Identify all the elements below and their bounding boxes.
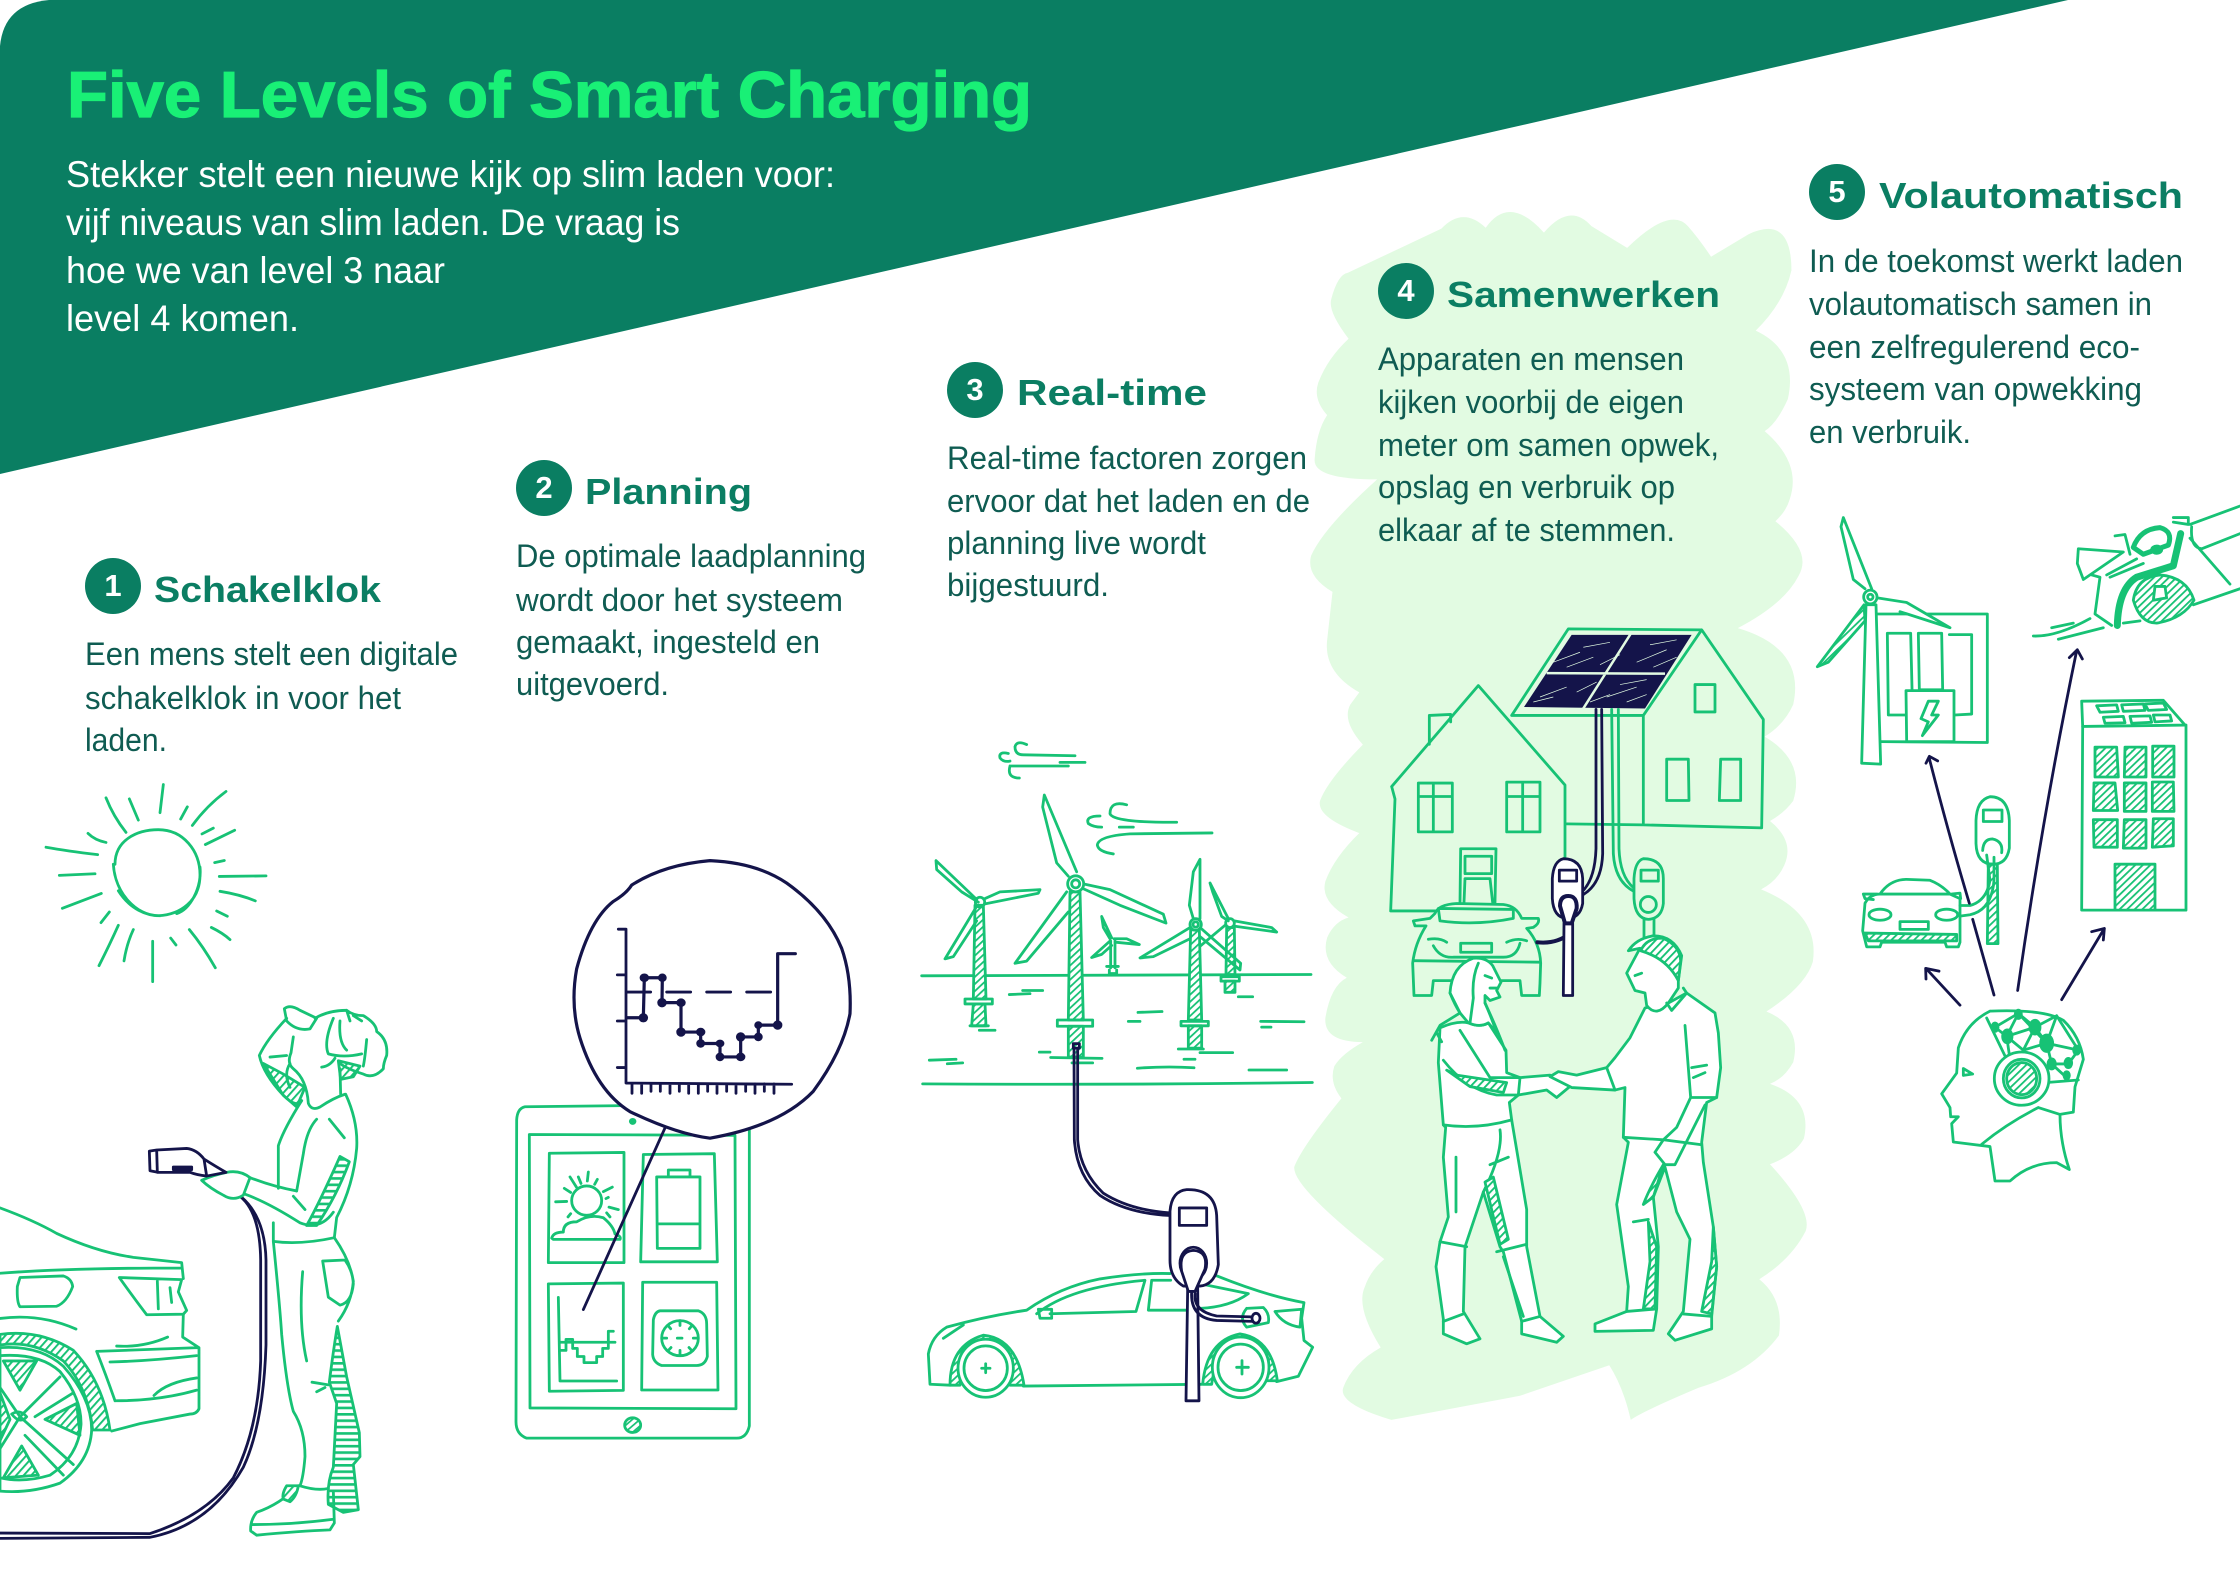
arrows — [1926, 650, 2104, 1005]
step 2 text: gemaakt, ingesteld en — [516, 624, 820, 660]
pointer line — [583, 1128, 665, 1310]
green charger — [1634, 859, 1663, 938]
step 2 text — [515, 538, 866, 702]
woman — [202, 1007, 387, 1535]
solar panels — [1524, 634, 1692, 709]
step 2 heading — [516, 460, 752, 516]
tablet — [516, 1104, 749, 1438]
charging cable — [0, 1196, 266, 1538]
step 3 text: bijgestuurd. — [947, 567, 1109, 603]
wind turbine and factory — [1817, 518, 1987, 764]
step 4 text: kijken voorbij de eigen — [1378, 384, 1684, 420]
header banner — [0, 0, 2068, 474]
intro text: Stekker stelt een nieuwe kijk op slim laden voor: — [66, 154, 835, 195]
step 4 heading — [1378, 263, 1720, 319]
step 1 heading — [85, 558, 382, 614]
car rear — [0, 1208, 199, 1492]
parked car — [1413, 903, 1541, 996]
step 4 text: opslag en verbruik op — [1378, 469, 1675, 505]
step 1 heading: 1 — [104, 568, 122, 603]
step 1 heading: Schakelklok — [154, 569, 382, 610]
icon: sun — [46, 785, 266, 982]
step 4 heading: Samenwerken — [1447, 274, 1720, 315]
step 5 text — [1809, 243, 2183, 450]
step 3 text: planning live wordt — [947, 525, 1206, 561]
step 1 text — [85, 636, 458, 758]
step 5 text: een zelfregulerend eco- — [1809, 329, 2140, 365]
illustration: level 3 wind park, charger and car — [922, 743, 1313, 1401]
step 1 text: Een mens stelt een digitale — [85, 636, 458, 672]
intro text — [66, 154, 835, 339]
woman shaking hands — [1432, 958, 1572, 1344]
step 5 heading — [1809, 164, 2183, 220]
car — [928, 1273, 1313, 1398]
step 2 heading: 2 — [535, 470, 553, 505]
AI head with neural network — [1942, 1010, 2083, 1181]
step 4 text: elkaar af te stemmen. — [1378, 512, 1675, 548]
step 2 text: wordt door het systeem — [515, 582, 843, 618]
intro text: level 4 komen. — [66, 298, 299, 339]
man shaking hands — [1550, 936, 1721, 1340]
step 3 heading: Real-time — [1017, 372, 1207, 413]
back house — [1512, 629, 1763, 828]
building — [2082, 700, 2186, 910]
title: Five Levels of Smart Charging — [67, 58, 1032, 131]
charger and car — [1863, 797, 2009, 947]
step 4 text: Apparaten en mensen — [1378, 341, 1684, 377]
step 5 text: In de toekomst werkt laden — [1809, 243, 2183, 279]
wind and sea — [922, 743, 1312, 1084]
charger with cable from turbine — [1073, 1044, 1260, 1401]
magnifier with price chart — [574, 861, 850, 1138]
illustration: level 5 AI brain controlling grid — [1817, 506, 2240, 1181]
step 3 text: Real-time factoren zorgen — [947, 440, 1307, 476]
step 2 text: uitgevoerd. — [516, 666, 669, 702]
front house — [1391, 686, 1565, 911]
step 1 text: laden. — [85, 722, 167, 758]
step 5 text: volautomatisch samen in — [1809, 286, 2152, 322]
wind turbines — [936, 795, 1277, 1057]
navy charger — [1537, 859, 1583, 996]
step 5 text: systeem van opwekking — [1809, 371, 2142, 407]
illustration: level 2 tablet with chart magnifier — [516, 861, 850, 1438]
step 4 heading: 4 — [1397, 273, 1415, 308]
step 3 text: ervoor dat het laden en de — [947, 483, 1310, 519]
illustration: level 4 houses, solar panels, chargers and people — [1391, 629, 1763, 1344]
step 2 heading: Planning — [585, 471, 752, 512]
electric vehicle top right — [2033, 506, 2240, 639]
power cables — [1583, 709, 1633, 895]
step 4 text: meter om samen opwek, — [1378, 427, 1719, 463]
charging plug — [149, 1148, 226, 1176]
step 2 text: De optimale laadplanning — [516, 538, 866, 574]
step 1 text: schakelklok in voor het — [85, 680, 401, 716]
step 5 text: en verbruik. — [1809, 414, 1971, 450]
step 3 heading — [947, 362, 1207, 418]
intro text: vijf niveaus van slim laden. De vraag is — [66, 202, 680, 243]
illustration: level 1 sun, woman, car and cable — [0, 785, 387, 1538]
step 4 text — [1378, 341, 1719, 548]
intro text: hoe we van level 3 naar — [66, 250, 445, 291]
panel 4 background blob — [1294, 212, 1814, 1420]
step 3 heading: 3 — [966, 372, 984, 407]
step 5 heading: 5 — [1828, 174, 1846, 209]
step 5 heading: Volautomatisch — [1879, 175, 2183, 216]
step 3 text — [947, 440, 1310, 603]
